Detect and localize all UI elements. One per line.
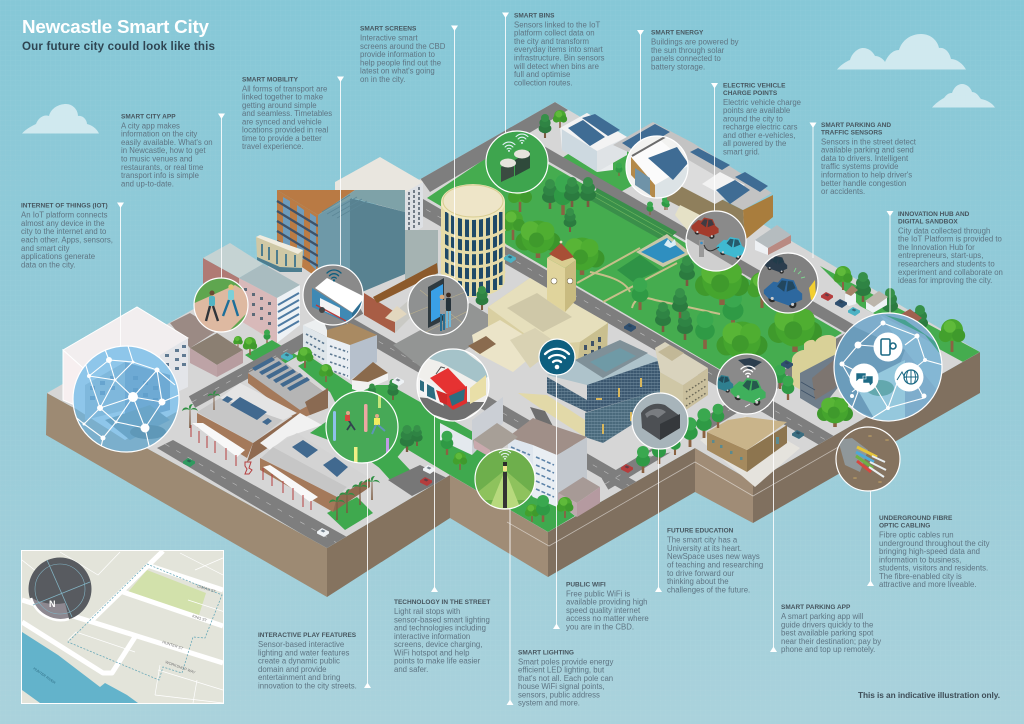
text: smart parking and traffic sensors: information to help driver's <box>821 170 912 179</box>
circle: smart parking app green car <box>711 354 777 414</box>
text: smart parking app: near their destination; pay by <box>781 637 881 646</box>
text: technology in the street <box>394 599 490 674</box>
text: underground fibre <box>879 515 990 589</box>
text: innovation hub: ideas for improving the city. <box>898 276 992 285</box>
text: interactive play features: Sensor-based interactive <box>258 640 344 649</box>
circle: interactive play <box>326 391 398 467</box>
text: smart city app <box>121 113 213 188</box>
text: interactive play features <box>258 632 357 690</box>
text: smart lighting: house WiFi signal points, <box>518 682 605 691</box>
text: smart parking app: phone and top up remotely. <box>781 645 875 654</box>
text: smart bins: full and optimise <box>514 70 570 79</box>
buildings: back white block <box>560 113 627 172</box>
text: internet of things: INTERNET OF THINGS (IOT) <box>21 202 108 210</box>
text: smart city app: easily available. What's on <box>121 138 213 147</box>
text: electric vehicle charge points: Electric vehicle charge <box>723 98 801 107</box>
text: smart parking and traffic sensors: available parking and send <box>821 146 914 155</box>
text: smart lighting: that's not all. Each pole can <box>518 674 613 683</box>
text: electric vehicle charge points: CHARGE POINTS <box>723 90 778 97</box>
text: smart bins: platform collect data on <box>514 29 595 38</box>
locator map <box>22 550 225 704</box>
text: innovation hub: INNOVATION HUB AND <box>898 211 970 218</box>
text: electric vehicle charge points: around the city to <box>723 114 783 123</box>
leader lines with arrow markers <box>117 12 894 705</box>
text: public wifi: available providing high <box>566 598 648 607</box>
circle: smart parking sensors <box>758 253 818 313</box>
title: Newcastle Smart City <box>22 16 210 37</box>
text: smart mobility: linked together to make <box>242 93 323 102</box>
text: electric vehicle charge points: smart grid. <box>723 147 760 156</box>
text: smart mobility: and seamless. Timetables <box>242 109 332 118</box>
text: smart city app: SMART CITY APP <box>121 113 176 120</box>
text: smart mobility <box>242 76 332 151</box>
text: smart bins: the city and transform <box>514 37 589 46</box>
title <box>22 16 215 53</box>
ground surface <box>47 102 980 548</box>
buildings: white block under tram <box>440 397 518 470</box>
buildings: small houses by IoT block <box>170 313 243 377</box>
text: smart screens: SMART SCREENS <box>360 25 417 32</box>
text: innovation hub: experiment and collaborate on <box>898 268 1003 277</box>
plaza <box>394 303 488 367</box>
text: innovation hub: researchers and students to <box>898 259 995 268</box>
text: public wifi <box>566 581 649 631</box>
circle: smart bins <box>486 131 548 193</box>
text: future education: thinking about the <box>667 577 729 586</box>
text: smart bins: will detect when bins are <box>513 62 599 71</box>
text: interactive play features: innovation to the city streets. <box>258 681 357 690</box>
text: future education: FUTURE EDUCATION <box>667 528 734 535</box>
text: smart energy: the sun through solar <box>651 46 725 55</box>
text: public wifi: PUBLIC WIFI <box>566 581 606 588</box>
text: smart energy: Buildings are powered by <box>651 38 739 47</box>
buildings: white and taupe block <box>508 418 600 522</box>
text: smart city app: restaurants, or real time <box>121 163 203 172</box>
text: smart energy <box>651 30 739 72</box>
text: smart bins: Sensors linked to the IoT <box>514 20 600 29</box>
text: electric vehicle charge points: ELECTRIC VEHICLE <box>723 82 786 90</box>
text: innovation hub: the IoT Platform is provided to <box>898 235 1003 244</box>
circle: public WiFi <box>539 339 575 375</box>
text: smart parking app: A smart parking app will <box>781 612 864 621</box>
text: smart bins: collection routes. <box>514 78 573 87</box>
text: future education: challenges of the future. <box>667 585 750 594</box>
circle: EV charge points <box>685 210 746 272</box>
text: future education: University at its heart. <box>667 544 742 553</box>
circle: future education VR headset <box>632 393 688 449</box>
text: interactive play features: lighting and water features <box>258 648 350 657</box>
text: future education <box>667 528 763 594</box>
text: underground fibre: The fibre-enabled city is <box>879 572 962 581</box>
text: internet of things: almost any device in the <box>21 219 105 228</box>
text: underground fibre: underground throughout the city <box>879 539 990 548</box>
street trees <box>636 404 724 473</box>
text: smart mobility: travel experience. <box>242 142 304 151</box>
text: innovation hub <box>898 211 1003 285</box>
park paths and pond <box>577 248 720 314</box>
grass and roads <box>157 102 980 549</box>
text: future education: The smart city has a <box>667 536 738 545</box>
text: underground fibre: information to business, <box>879 555 961 564</box>
text: technology in the street: WiFi hotspot and help <box>394 648 470 657</box>
earth plinth <box>46 352 980 597</box>
text: smart parking and traffic sensors: SMART PARKING AND <box>821 122 891 129</box>
buildings: brick building with copper roof <box>364 263 438 333</box>
text: smart lighting: Smart poles provide energy <box>518 657 613 666</box>
circle: smart energy solar roof <box>626 136 690 200</box>
compass <box>28 558 92 620</box>
text: interactive play features: domain and provide <box>258 665 326 674</box>
text: smart mobility: getting around simple <box>242 101 317 110</box>
text: electric vehicle charge points <box>723 82 801 156</box>
text: technology in the street: TECHNOLOGY IN THE STREET <box>394 599 490 606</box>
text: smart city app: and up-to-date. <box>121 179 174 188</box>
text: smart bins: everyday items into smart <box>514 45 604 54</box>
text: interactive play features: entertainment and bring <box>258 673 340 682</box>
buildings: grey block beside tower <box>405 230 438 280</box>
pavement around the central blocks <box>648 426 710 456</box>
street vehicles <box>183 153 860 537</box>
text: underground fibre: Fibre optic cables run <box>879 530 954 540</box>
text: technology in the street: and technologies including <box>394 624 486 633</box>
text: smart parking app: SMART PARKING APP <box>781 604 851 611</box>
text: technology in the street: points to make life easier <box>394 657 481 666</box>
circle: smart mobility bus <box>303 265 365 325</box>
text: smart energy: panels connected to <box>651 54 721 63</box>
buildings: right-hand houses <box>833 266 965 352</box>
text: technology in the street: Light rail stops with <box>394 607 460 616</box>
buildings: long university building with solar roof <box>613 122 773 240</box>
buildings: tan block near crossing <box>700 416 800 487</box>
text: smart lighting: SMART LIGHTING <box>518 649 574 656</box>
buildings: town hall <box>468 241 608 372</box>
text: smart energy: battery storage. <box>651 63 705 72</box>
text: underground fibre: attractive and more liveable. <box>879 580 977 589</box>
text: innovation hub: City data collected through <box>898 226 990 235</box>
roads <box>157 102 568 549</box>
text: smart screens: help people find out the <box>360 58 441 67</box>
text: smart parking and traffic sensors: or accidents. <box>821 187 865 196</box>
text: smart lighting <box>518 649 613 708</box>
text: internet of things: city to the internet and to <box>21 227 107 236</box>
text: underground fibre: OPTIC CABLING <box>879 522 930 529</box>
text: internet of things: data on the city. <box>21 260 75 269</box>
text: smart mobility: are synced and vehicle <box>242 117 322 126</box>
text: underground fibre: bringing high-speed data and <box>879 547 980 556</box>
text: smart screens <box>360 25 446 84</box>
locator map: KING ST <box>192 614 208 623</box>
isometric city model <box>46 102 980 597</box>
circle: technology in the street tram <box>416 348 492 423</box>
text: innovation hub: DIGITAL SANDBOX <box>898 218 958 225</box>
text: future education: NewSpace uses new ways <box>667 552 760 561</box>
cloud: upper left <box>22 104 99 134</box>
text: technology in the street: and safer. <box>394 665 428 674</box>
text: interactive play features: create a dynamic public <box>258 657 340 666</box>
locator map: HUNTER RIVER <box>32 667 57 685</box>
text: smart parking and traffic sensors: better handle congestion <box>821 179 906 188</box>
text: public wifi: Free public WiFi is <box>566 589 630 598</box>
text: interactive play features: INTERACTIVE PLAY FEATURES <box>258 632 357 639</box>
text: smart bins: SMART BINS <box>514 12 555 19</box>
text: smart city app: in Newcastle, how to get <box>121 146 206 155</box>
text: smart mobility: time to provide a better <box>242 134 322 143</box>
text: smart bins: infrastructure. Bin sensors <box>514 53 605 62</box>
text: smart parking app <box>781 604 881 654</box>
text: smart city app: to music venues and <box>121 154 193 163</box>
text: future education: to drive forward our <box>667 569 735 578</box>
text: smart parking and traffic sensors <box>821 122 917 196</box>
text: smart mobility: SMART MOBILITY <box>242 76 299 83</box>
text: innovation hub: entrepreneurs, start-ups, <box>898 251 983 260</box>
text: electric vehicle charge points: recharge electric cars <box>723 123 798 132</box>
disclaimer: This is an indicative illustration only. <box>858 690 1000 700</box>
text: public wifi: you are in the CBD. <box>566 622 634 631</box>
buildings: lower factory with awning <box>245 413 370 512</box>
text: smart screens: provide information to <box>360 50 436 59</box>
buildings: cylinder tower <box>441 184 505 310</box>
text: smart screens: Interactive smart <box>360 34 418 43</box>
text: smart parking and traffic sensors: TRAFFIC SENSORS <box>821 129 883 136</box>
buildings: back white tower <box>335 157 423 238</box>
text: public wifi: access no matter where <box>566 614 649 623</box>
palm trees <box>182 391 380 520</box>
IoT wireframe building <box>63 307 188 420</box>
buildings: gold silos and grey block <box>774 335 853 427</box>
circle: underground fibre optic cable <box>836 427 900 491</box>
text: future education: of teaching and researching <box>667 561 763 570</box>
cloud: upper right large <box>837 34 966 70</box>
locator map: WORKSHOP WAY <box>165 660 196 675</box>
circle: innovation hub <box>830 313 945 421</box>
circle: smart screens kiosk <box>408 275 470 335</box>
text: smart lighting: sensors, public address <box>518 690 600 699</box>
text: smart lighting: system and more. <box>518 699 580 708</box>
text: internet of things: applications generate <box>21 252 95 261</box>
text: innovation hub: the Innovation Hub for <box>898 243 975 252</box>
buildings: midrise left of centre <box>233 317 423 452</box>
buildings: orange and blue tower <box>277 190 405 292</box>
locator map: LAMAN ST <box>197 584 217 594</box>
title: Our future city could look like this <box>22 40 215 53</box>
buildings: glass innovation block <box>518 340 660 443</box>
text: smart bins <box>513 12 605 87</box>
text: smart parking and traffic sensors: traffic systems provide <box>821 162 898 171</box>
locator map: HUNTER ST <box>162 640 184 651</box>
text: underground fibre: students, visitors and residents. <box>879 564 988 573</box>
text: smart screens: latest on what's going <box>360 67 435 76</box>
text: technology in the street: screens, device charging, <box>394 640 482 649</box>
circle: IoT network over building <box>70 346 180 460</box>
text: technology in the street: interactive information <box>394 632 470 641</box>
text: smart mobility: All forms of transport are <box>242 84 327 93</box>
text: underground fibre: UNDERGROUND FIBRE <box>879 515 953 522</box>
buildings: sawtooth solar factory <box>248 357 328 420</box>
text: smart screens: on in the city. <box>360 75 405 84</box>
circle: smart lighting pole <box>474 448 536 510</box>
text: internet of things: An IoT platform connects <box>21 211 108 220</box>
text: smart parking app: best available parking spot <box>781 629 874 638</box>
buildings: pink tall block <box>203 243 300 343</box>
text: smart parking app: guide drivers quickly to the <box>781 620 873 629</box>
buildings: small grey house <box>755 225 791 255</box>
text: electric vehicle charge points: and other e-vehicles, <box>723 131 795 140</box>
buildings: heritage factory with awning <box>191 383 297 466</box>
text: internet of things <box>21 202 113 269</box>
text: smart city app: information on the city <box>121 130 197 139</box>
cloud: right small <box>932 84 995 108</box>
buildings: small cream block <box>256 235 303 272</box>
text: internet of things: each other. Apps, sensors, <box>21 236 113 245</box>
text: smart city app: transport info is simple <box>121 171 199 180</box>
buildings: cream block <box>655 342 708 412</box>
text: public wifi: speed quality internet <box>566 606 641 615</box>
text: technology in the street: sensor-based smart lighting <box>394 615 490 624</box>
text: smart parking and traffic sensors: Sensors in the street detect <box>821 137 917 146</box>
text: smart lighting: efficient LED lighting, but <box>518 666 605 675</box>
text: smart energy: SMART ENERGY <box>651 30 704 36</box>
circle: smart city app walkers <box>193 277 249 333</box>
text: electric vehicle charge points: all powered by the <box>723 139 786 148</box>
text: electric vehicle charge points: points are available <box>723 106 790 115</box>
text: smart screens: screens around the CBD <box>360 42 446 51</box>
compass: N <box>49 599 56 609</box>
text: smart mobility: locations provided in real <box>242 126 329 135</box>
text: smart parking and traffic sensors: data to drivers. Intelligent <box>821 154 909 163</box>
trees: park <box>501 110 822 364</box>
text: internet of things: and smart city <box>21 244 70 253</box>
text: smart city app: A city app makes <box>121 121 180 130</box>
